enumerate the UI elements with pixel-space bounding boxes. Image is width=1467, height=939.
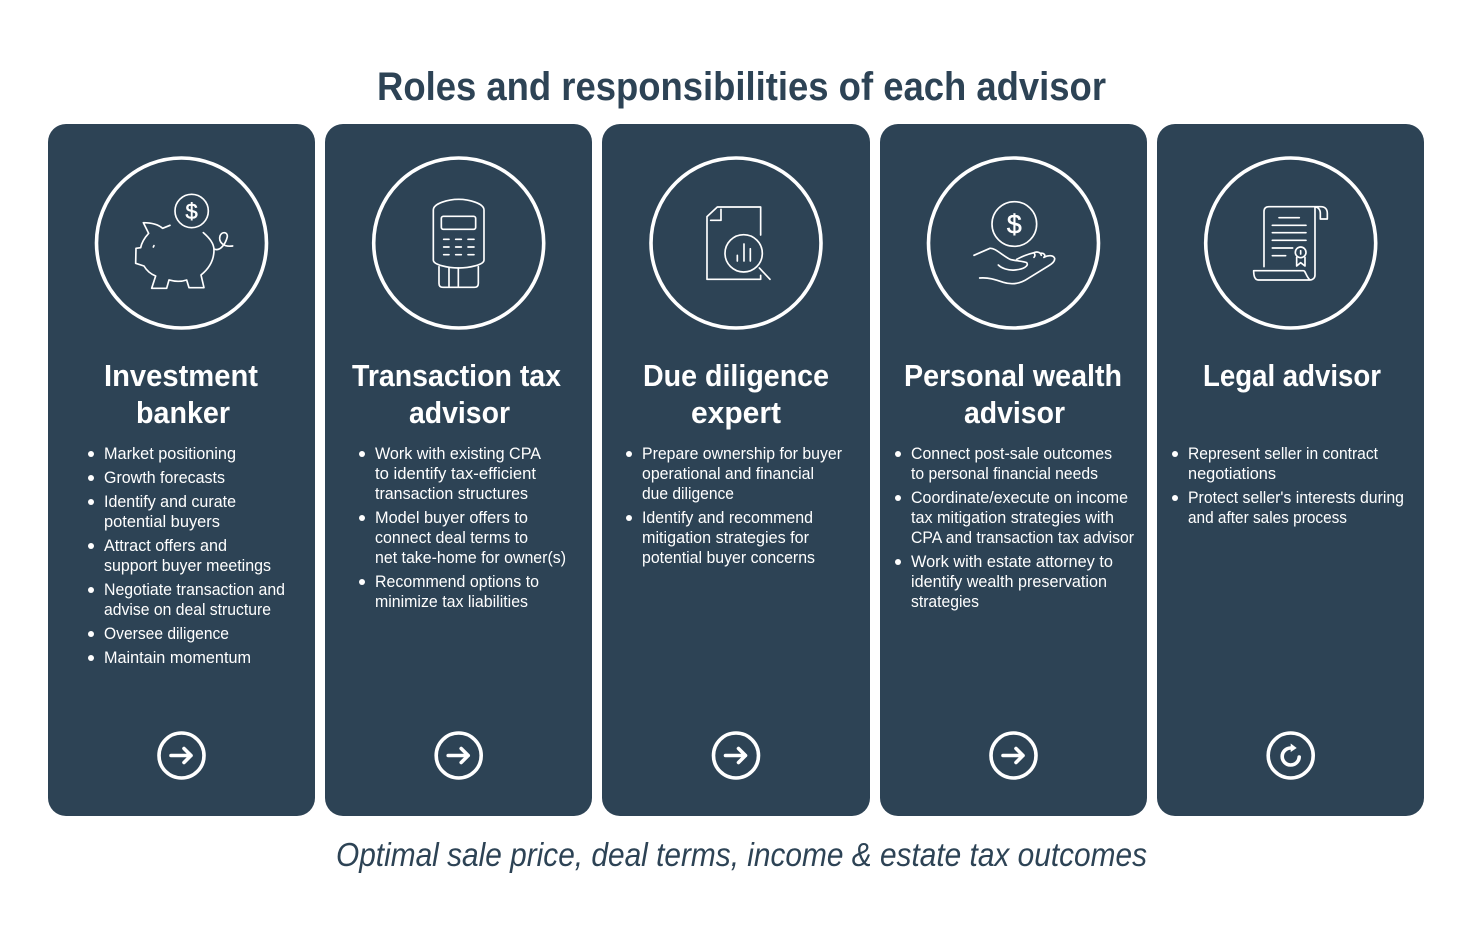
bullet list: legal advisor	[1172, 444, 1404, 527]
icon: hand holding coin: $	[1007, 210, 1022, 240]
panel: investment banker	[48, 124, 315, 816]
bullet list: investment banker: Identify and curate	[104, 492, 236, 511]
bullet list: personal wealth advisor: identify wealth preservation	[911, 572, 1107, 591]
bullet list: personal wealth advisor	[895, 444, 1134, 611]
bullet list: due diligence expert: potential buyer concerns	[642, 548, 815, 567]
bullet list: investment banker: advise on deal structure	[104, 600, 271, 619]
bullet list: transaction tax advisor	[359, 444, 566, 611]
bullet list: transaction tax advisor: Model buyer offers to	[375, 508, 528, 527]
bullet list: transaction tax advisor: net take-home for owner(s)	[375, 548, 566, 567]
bullet list: investment banker: Maintain momentum	[104, 648, 251, 667]
bullet list: personal wealth advisor: Work with estate attorney to	[911, 552, 1113, 571]
bullet list: due diligence expert: Prepare ownership for buyer	[642, 444, 842, 463]
bullet list: due diligence expert: mitigation strategies for	[642, 528, 809, 547]
bullet list: personal wealth advisor: Coordinate/execute on income	[911, 488, 1128, 507]
icon: repeat arrow	[1268, 733, 1313, 778]
heading: investment banker	[104, 358, 258, 430]
bullet list: investment banker: Attract offers and	[104, 536, 227, 555]
bullet list: transaction tax advisor: Recommend options to	[375, 572, 539, 591]
icon: hand holding coin	[928, 158, 1098, 328]
title: Roles and responsibilities of each advisor	[377, 65, 1106, 109]
heading: personal wealth advisor	[904, 358, 1122, 430]
bullet list: investment banker: potential buyers	[104, 512, 220, 531]
heading: due diligence expert: Due diligence	[643, 358, 829, 393]
bullet list: personal wealth advisor: strategies	[911, 592, 979, 611]
bullet list: due diligence expert	[626, 444, 842, 567]
bullet list: personal wealth advisor: to personal financial needs	[911, 464, 1098, 483]
bullet list: investment banker: support buyer meetings	[104, 556, 271, 575]
bullet list: transaction tax advisor: connect deal terms to	[375, 528, 528, 547]
bullet list: due diligence expert: Identify and recommend	[642, 508, 813, 527]
heading: legal advisor: Legal advisor	[1203, 358, 1381, 393]
icon: next arrow	[159, 733, 204, 778]
panel: personal wealth advisor	[880, 124, 1147, 816]
heading: due diligence expert: expert	[691, 395, 781, 430]
bullet list: investment banker: Oversee diligence	[104, 624, 229, 643]
bullet list: transaction tax advisor: transaction structures	[375, 484, 528, 503]
bullet list: legal advisor: Protect seller's interests during	[1188, 488, 1404, 507]
heading: transaction tax advisor: advisor	[409, 395, 510, 430]
heading: personal wealth advisor: advisor	[964, 395, 1065, 430]
heading: transaction tax advisor	[352, 358, 562, 430]
heading: transaction tax advisor: Transaction tax	[352, 358, 562, 393]
bullet list: transaction tax advisor: minimize tax liabilities	[375, 592, 528, 611]
bullet list: investment banker: Market positioning	[104, 444, 236, 463]
bullet list: legal advisor: Represent seller in contract	[1188, 444, 1378, 463]
icon: piggy bank	[96, 158, 266, 328]
bullet list: investment banker: Negotiate transaction and	[104, 580, 285, 599]
bullet list: legal advisor: and after sales process	[1188, 508, 1347, 527]
icon: legal scroll	[1206, 158, 1376, 328]
icon: next arrow	[436, 733, 481, 778]
bullet list: due diligence expert: due diligence	[642, 484, 734, 503]
footer tagline: Optimal sale price, deal terms, income & estate tax outcomes	[336, 836, 1147, 873]
icon: document with magnifier	[651, 158, 821, 328]
panel: legal advisor	[1157, 124, 1424, 816]
icon: next arrow	[991, 733, 1036, 778]
icon: piggy bank: $	[186, 199, 198, 224]
bullet list: transaction tax advisor: to identify tax-efficient	[375, 464, 536, 483]
bullet list: legal advisor: negotiations	[1188, 464, 1276, 483]
panel: transaction tax advisor	[325, 124, 592, 816]
heading: investment banker: banker	[136, 395, 230, 430]
bullet list: personal wealth advisor: CPA and transaction tax advisor	[911, 528, 1134, 547]
bullet list: personal wealth advisor: tax mitigation strategies with	[911, 508, 1114, 527]
bullet list: due diligence expert: operational and financial	[642, 464, 814, 483]
heading: due diligence expert	[643, 358, 829, 430]
heading: personal wealth advisor: Personal wealth	[904, 358, 1122, 393]
bullet list: investment banker	[88, 444, 285, 667]
bullet list: personal wealth advisor: Connect post-sale outcomes	[911, 444, 1112, 463]
icon: card terminal	[374, 158, 544, 328]
panel: due diligence expert	[602, 124, 870, 816]
bullet list: investment banker: Growth forecasts	[104, 468, 225, 487]
icon: next arrow	[714, 733, 758, 778]
heading: investment banker: Investment	[104, 358, 258, 393]
bullet list: transaction tax advisor: Work with existing CPA	[375, 444, 542, 463]
